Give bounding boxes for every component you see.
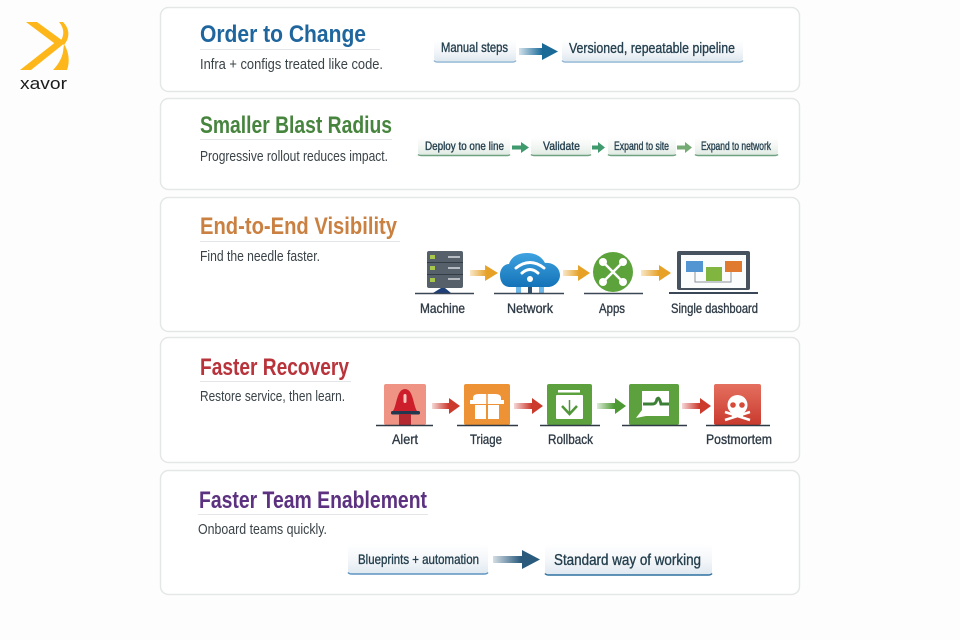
pill: expand to site: Expand to site	[614, 139, 669, 153]
label: rollback: Rollback	[548, 431, 594, 447]
pill: standard way of working	[545, 544, 712, 575]
pill: deploy to one line: Deploy to one line	[425, 139, 504, 153]
panel: order to change	[160, 8, 800, 92]
text: infra + configs: Infra + configs treated like code.	[200, 57, 383, 73]
arrow: network to apps	[563, 265, 590, 281]
logo: xavor	[20, 22, 69, 93]
panel: faster team enablement	[160, 470, 800, 594]
label: network: Network	[507, 300, 554, 316]
icon: rollback	[540, 384, 600, 426]
heading: smaller blast radius: Smaller Blast Radius	[200, 112, 392, 139]
text: find the needle: Find the needle faster.	[200, 249, 320, 265]
arrow: monitor to postmortem	[682, 398, 711, 414]
text: restore service: Restore service, then learn.	[200, 389, 345, 405]
icon: network cloud	[494, 253, 564, 294]
arrow: rollback to monitor	[597, 398, 626, 414]
arrow: alert to triage	[432, 398, 460, 414]
pill: blueprints + automation	[348, 544, 488, 574]
pill: manual steps: Manual steps	[441, 39, 508, 55]
icon: machine server	[415, 251, 474, 294]
pill: validate: Validate	[543, 139, 580, 153]
pill: expand to site	[608, 137, 676, 156]
icon: triage	[457, 384, 518, 426]
panel: smaller blast radius	[160, 98, 800, 190]
icon: apps hub	[584, 252, 643, 294]
pill: deploy to one line	[418, 137, 510, 156]
arrow: manual to pipeline	[519, 43, 558, 60]
pill: versioned pipeline	[562, 40, 743, 62]
arrow: site to network	[677, 142, 692, 153]
logo: xavor: xavor	[20, 75, 68, 93]
pill: validate	[531, 137, 591, 156]
label: alert: Alert	[392, 431, 418, 447]
arrow: blueprints to standard	[493, 550, 540, 569]
icon: alert	[376, 384, 433, 426]
pill: manual steps	[434, 39, 516, 62]
icon: postmortem	[706, 384, 770, 426]
arrow: apps to dashboard	[641, 265, 671, 281]
label: machine: Machine	[420, 300, 465, 316]
heading: end-to-end visibility: End-to-End Visibility	[200, 213, 397, 240]
icon: restored monitoring	[622, 384, 687, 426]
pill: blueprints + automation: Blueprints + automation	[358, 551, 479, 567]
panel: faster recovery	[160, 338, 800, 462]
panel: end-to-end visibility	[160, 198, 800, 332]
label: postmortem: Postmortem	[706, 431, 772, 447]
arrow: validate to site	[592, 142, 605, 153]
arrow: triage to rollback	[514, 398, 543, 414]
heading: faster recovery: Faster Recovery	[200, 354, 349, 381]
pill: expand to network	[695, 137, 778, 156]
label: single dashboard: Single dashboard	[671, 300, 758, 316]
arrow: machine to network	[470, 265, 498, 281]
label: apps: Apps	[599, 300, 625, 316]
heading: faster team enablement: Faster Team Enablement	[199, 487, 427, 514]
text: progressive rollout: Progressive rollout reduces impact.	[200, 149, 388, 165]
pill: expand to network: Expand to network	[701, 139, 772, 153]
heading: order to change: Order to Change	[200, 21, 366, 48]
arrow: deploy to validate	[512, 142, 529, 153]
pill: standard way of working: Standard way of working	[554, 552, 701, 569]
icon: single dashboard laptop	[669, 251, 758, 293]
text: onboard teams: Onboard teams quickly.	[198, 522, 327, 538]
label: triage: Triage	[470, 431, 502, 447]
pill: versioned pipeline: Versioned, repeatable pipeline	[569, 40, 735, 57]
